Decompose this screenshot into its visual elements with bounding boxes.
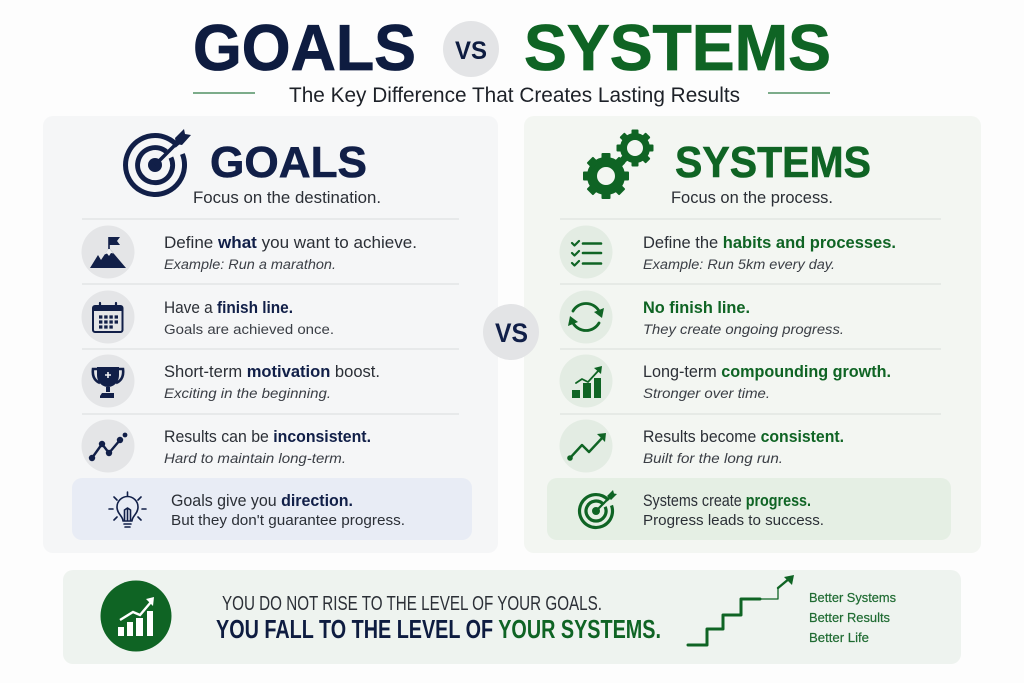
list: better outcomes: Better Results: [809, 610, 890, 625]
icon: stairs arrow: [688, 575, 794, 645]
quote text: [216, 592, 661, 644]
icon: mountain flag: [82, 226, 134, 278]
badge: center vs: VS: [495, 318, 528, 348]
row: finish line: Have a finish line.: [164, 299, 293, 317]
list: better outcomes: [809, 590, 896, 645]
row: consistent: Results become consistent.: [643, 428, 844, 446]
row: motivation: Exciting in the beginning.: [164, 386, 331, 402]
heading: systems: SYSTEMS: [675, 138, 871, 187]
title: GOALS: [193, 11, 416, 84]
heading: goals: GOALS: [210, 138, 367, 187]
quote text: YOU DO NOT RISE TO THE LEVEL OF YOUR GOALS.: [222, 592, 602, 615]
callout: goals: [72, 478, 472, 540]
row: no finish line: [560, 290, 844, 344]
row: finish line: Goals are achieved once.: [164, 322, 334, 338]
row: consistent: Built for the long run.: [643, 451, 783, 467]
icon: light bulb: [109, 492, 146, 527]
callout: goals: But they don't guarantee progress.: [171, 512, 405, 529]
row: habits: [560, 226, 896, 278]
list: better outcomes: Better Systems: [809, 590, 896, 605]
row: define what: Define what you want to achieve.: [164, 234, 417, 252]
tagline: goals: Focus on the destination.: [193, 189, 381, 207]
row: inconsistent: [82, 420, 371, 472]
row: compounding: Stronger over time.: [643, 386, 770, 402]
title: SYSTEMS: [524, 11, 831, 84]
badge: center vs: [483, 304, 539, 360]
icon: growth bars: [560, 354, 612, 408]
callout: goals: Goals give you direction.: [171, 492, 353, 510]
row: define what: Example: Run a marathon.: [164, 257, 336, 273]
row: no finish line: No finish line.: [643, 299, 750, 317]
icon: trend arrow: [560, 420, 612, 472]
row: motivation: Short-term motivation boost.: [164, 363, 380, 381]
list: better outcomes: Better Life: [809, 630, 869, 645]
panel: goals: [43, 116, 498, 553]
icon: checklist: [560, 226, 612, 278]
icon: refresh arrows: [560, 290, 612, 344]
row: inconsistent: Results can be inconsistent.: [164, 428, 371, 446]
banner: quote: [63, 570, 961, 664]
tagline: systems: Focus on the process.: [671, 189, 833, 207]
callout: systems: [547, 478, 951, 540]
subtitle: The Key Difference That Creates Lasting Results: [289, 84, 740, 107]
icon: calendar: [82, 290, 134, 344]
row: habits: Example: Run 5km every day.: [643, 257, 835, 273]
row: habits: Define the habits and processes.: [643, 234, 896, 252]
title: [193, 11, 831, 84]
callout: systems: Systems create progress.: [643, 492, 811, 510]
row: define what: [82, 226, 417, 278]
callout: systems: Progress leads to success.: [643, 512, 824, 529]
row: no finish line: They create ongoing progress.: [643, 322, 844, 338]
title: VS: [455, 37, 487, 65]
icon: green target: [579, 490, 617, 528]
quote text: YOU FALL TO THE LEVEL OF YOUR SYSTEMS.: [216, 614, 661, 644]
icon: growth badge: [100, 580, 172, 652]
panel: systems: [524, 116, 981, 553]
row: inconsistent: Hard to maintain long-term.: [164, 451, 346, 467]
icon: trophy: [82, 354, 134, 408]
icon: gears: [573, 122, 661, 209]
icon: zigzag trend: [82, 420, 134, 472]
row: compounding: [560, 354, 891, 408]
icon: target with arrow: [126, 129, 191, 194]
row: consistent: [560, 420, 844, 472]
row: finish line: [82, 290, 334, 344]
row: motivation: [82, 354, 380, 408]
row: compounding: Long-term compounding growth.: [643, 363, 891, 381]
